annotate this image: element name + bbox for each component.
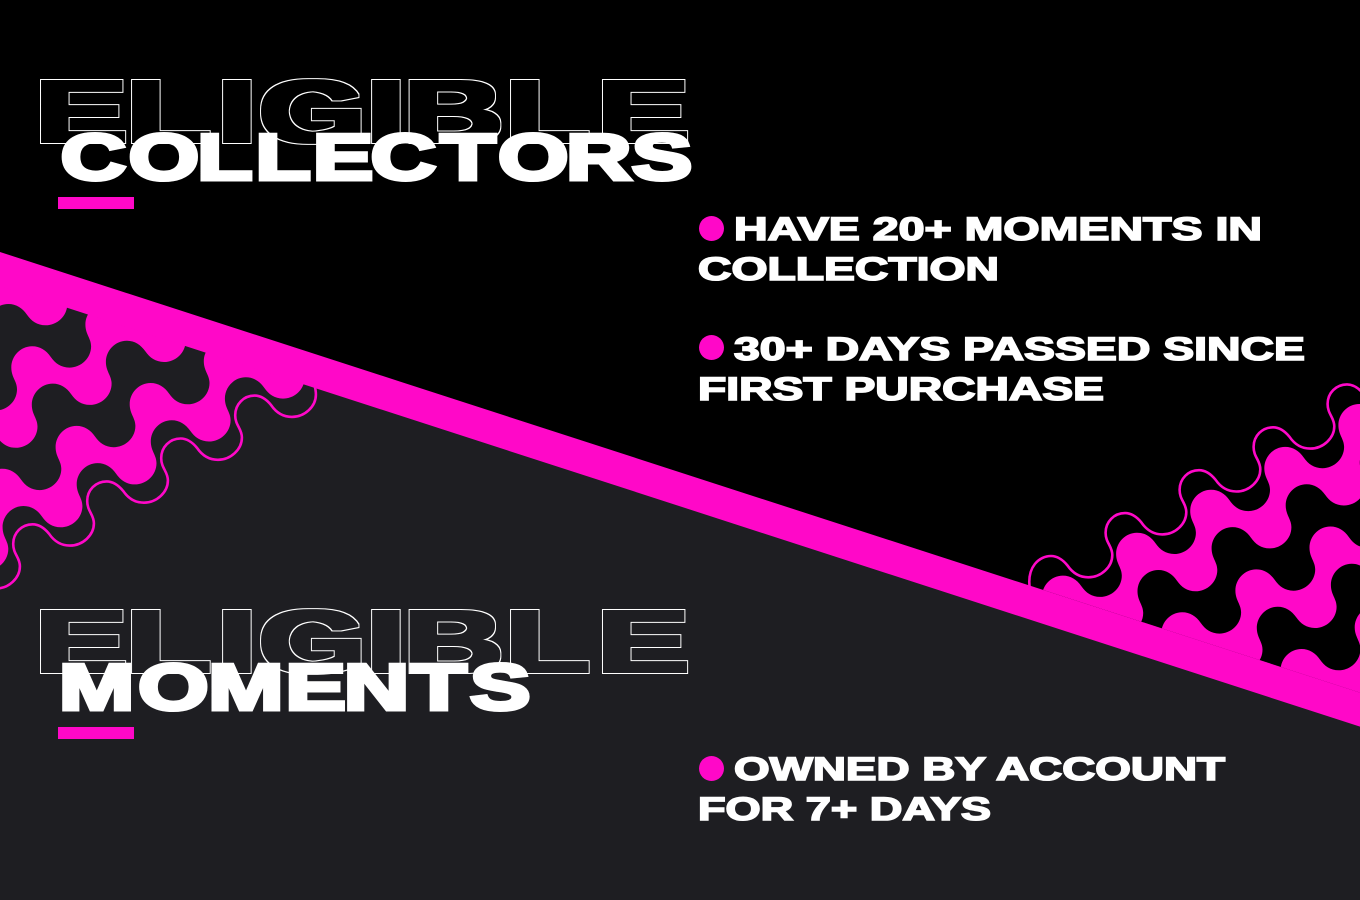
heading: eligible moments bbox=[36, 592, 688, 724]
wave outline: left bbox=[0, 383, 316, 588]
bullet bbox=[699, 756, 724, 781]
criterion: 30+ days: 30+ DAYS PASSED SINCE bbox=[734, 330, 1305, 367]
list: moment criteria bbox=[698, 750, 1225, 827]
criterion: owned 7+ days bbox=[698, 750, 1225, 827]
wave outline: right bbox=[1029, 384, 1360, 590]
criterion: owned 7+ days: OWNED BY ACCOUNT bbox=[734, 750, 1225, 787]
pattern: right pink wavy blobs bbox=[1043, 404, 1360, 692]
criterion: 20+ moments: HAVE 20+ MOMENTS IN bbox=[734, 210, 1262, 247]
accent bar: moments bbox=[58, 727, 134, 739]
pattern: left pink wavy blobs bbox=[0, 286, 1359, 726]
bullet bbox=[699, 216, 724, 241]
solid word: collectors: COLLECTORS bbox=[61, 121, 692, 194]
diagonal pink band bbox=[0, 252, 1360, 727]
solid word: moments: MOMENTS bbox=[59, 651, 530, 724]
outlined word: eligible: ELIGIBLE bbox=[36, 62, 688, 161]
bullet bbox=[699, 335, 724, 360]
list: collector criteria bbox=[698, 210, 1305, 407]
outlined word: eligible: ELIGIBLE bbox=[36, 592, 688, 691]
heading: eligible collectors bbox=[36, 62, 692, 194]
criterion: 20+ moments bbox=[698, 210, 1262, 287]
accent bar: collectors bbox=[58, 197, 134, 209]
panel: bottom charcoal background bbox=[0, 286, 1360, 900]
criterion: 30+ days: FIRST PURCHASE bbox=[698, 370, 1104, 407]
criterion: 20+ moments: COLLECTION bbox=[698, 250, 999, 287]
criterion: 30+ days bbox=[698, 330, 1305, 407]
criterion: owned 7+ days: FOR 7+ DAYS bbox=[698, 790, 991, 827]
